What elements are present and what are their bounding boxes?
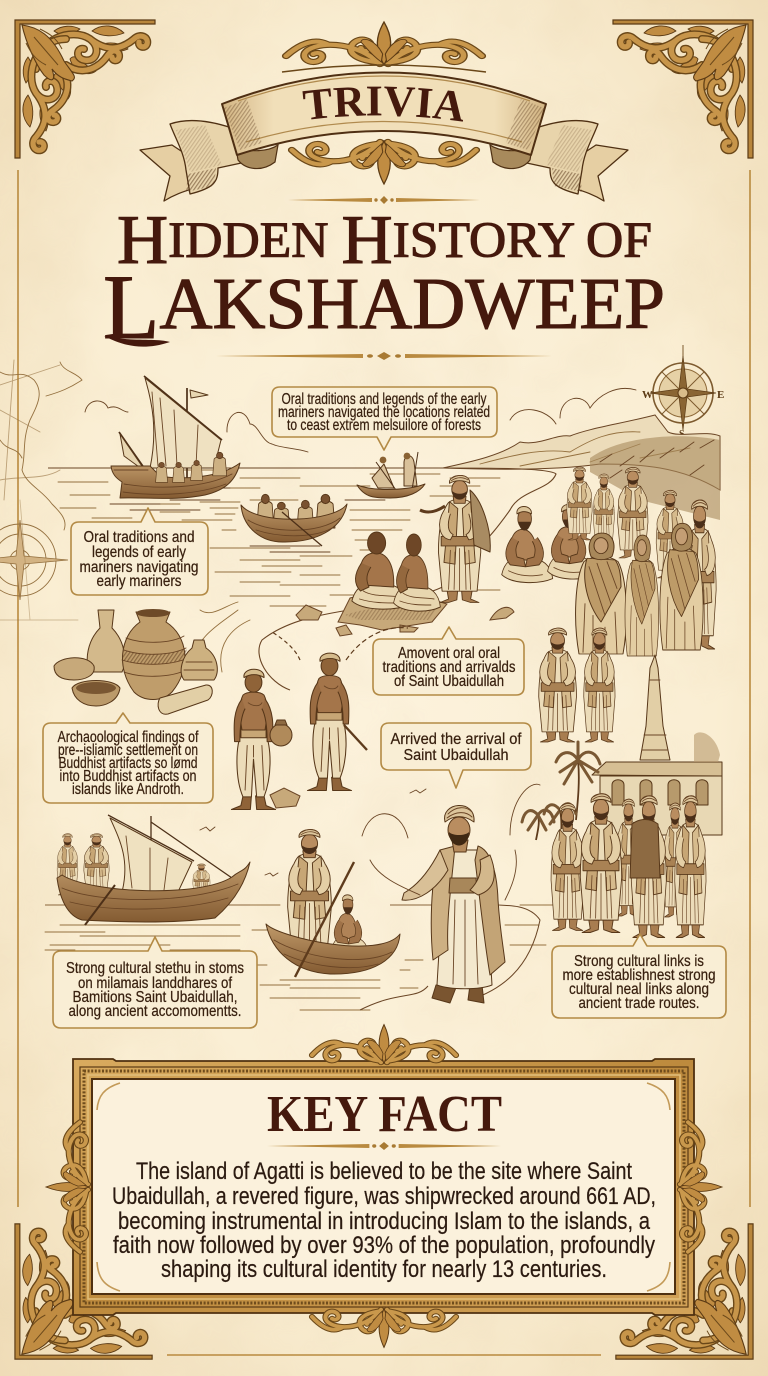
illustration: far boat with two standing figures [357, 452, 425, 498]
key fact inner panel [92, 1079, 675, 1294]
compass rose top right: E [717, 389, 724, 401]
illustration: seated elders [502, 505, 594, 583]
background map and compass left [0, 360, 82, 620]
callout: early mariners: legends of early [92, 544, 186, 561]
callout: early mariners: Oral traditions and [84, 529, 194, 546]
callout: early mariners: early mariners [96, 573, 182, 590]
callout: strong cultural links: ancient trade routes. [578, 995, 700, 1012]
ornament: top-left corner [15, 20, 155, 158]
illustration: bare-chested man with pot [231, 669, 292, 810]
callout: oral traditions, top centre: to ceast extrem melsuilore of forests [287, 417, 481, 434]
callout: oral traditions, top centre [272, 387, 497, 450]
illustration: two men in robes [539, 628, 615, 742]
illustration: crowd of islanders [567, 467, 716, 656]
sea and shoreline strokes [45, 468, 556, 1010]
callout: strong cultural stethu: Strong cultural stethu in stoms [66, 960, 244, 977]
divider under banner [288, 196, 480, 204]
illustration: trading dhow with crew [57, 815, 250, 925]
callout: archaeological findings: pre--isliamic settlement on [58, 742, 198, 759]
illustration: palm trees [522, 742, 600, 845]
rocks on the beach [270, 594, 514, 808]
compass rose top right: W [642, 389, 653, 401]
title: lakshadweep: AKSHADWEEP [159, 263, 665, 344]
callout: oral traditions, top centre: mariners navigated the locations related [278, 404, 490, 421]
callout: strong cultural stethu: on milamais landdhares of [78, 975, 233, 992]
key fact body text [112, 1158, 656, 1283]
ornament: bottom-right corner [616, 1224, 753, 1359]
callout: amovent oral traditions: traditions and arrivalds [382, 659, 516, 676]
callout: amovent oral traditions: of Saint Ubaidullah [394, 673, 504, 690]
callout: strong cultural links: cultural neal links along [569, 981, 709, 998]
callout: strong cultural links: Strong cultural links is [574, 953, 704, 970]
title: hidden history of: H [341, 202, 393, 279]
illustration: standing storyteller and seated listeners [352, 475, 490, 611]
callout: strong cultural stethu: Bamitions Saint Ubaidullah, [72, 989, 238, 1006]
illustration: pottery and scroll artefacts [54, 609, 217, 714]
callout: early mariners: mariners navigating [80, 559, 198, 576]
key fact body text: faith now followed by over 93% of the population, profoundly [113, 1232, 655, 1259]
clouds near saint and birds [200, 784, 540, 900]
key fact body text: becoming instrumental in introducing Islam to the islands, a [118, 1208, 651, 1235]
compass rose top right: S [679, 429, 685, 440]
illustration: lighthouse tower and colonnade [592, 655, 722, 835]
illustration: large dhow at sea [111, 376, 240, 498]
callout: arrival of saint ubaidullah [381, 723, 531, 788]
callout: archaeological findings [43, 713, 213, 803]
key fact body text: The island of Agatti is believed to be the site where Saint [136, 1158, 632, 1185]
key fact body text: Ubaidullah, a revered figure, was shipwrecked around 661 AD, [112, 1183, 656, 1210]
title: hidden history of: H [117, 202, 168, 279]
illustration: rowing boat with four figures [241, 494, 347, 546]
ornament: top-right corner [613, 20, 753, 158]
title: lakshadweep: L [103, 256, 159, 358]
callout: strong cultural links: more establishnest strong [562, 967, 716, 984]
divider under title [216, 352, 552, 360]
callout: strong cultural links [552, 934, 726, 1018]
banner: trivia ribbon [139, 20, 629, 202]
ornament: bottom-left corner [15, 1224, 152, 1359]
banner: trivia ribbon: TRIVIA [302, 86, 463, 122]
illustration: man with sword [272, 628, 408, 790]
callout: archaeological findings: islands like Androth. [72, 781, 184, 798]
callout: arrival of saint ubaidullah: Saint Ubaidullah [404, 747, 508, 764]
callout: oral traditions, top centre: Oral traditions and legends of the early [282, 391, 487, 408]
callout: amovent oral traditions: Amovent oral oral [398, 645, 500, 662]
clouds and distant hills [85, 388, 720, 520]
callout: early mariners [71, 508, 208, 595]
title: hidden history of: ISTORY OF [393, 213, 652, 269]
callout: archaeological findings: Archaoological findings of [58, 729, 199, 746]
key fact body text: shaping its cultural identity for nearly 13 centuries. [161, 1256, 607, 1283]
callout: strong cultural stethu [53, 937, 257, 1028]
callout: strong cultural stethu: along ancient accomomentts. [68, 1003, 242, 1020]
illustration: boatman and passenger [266, 829, 400, 977]
title: hidden history of: IDDEN [168, 213, 341, 269]
callout: amovent oral traditions [373, 627, 524, 695]
illustration: saint ubaidullah [402, 805, 505, 1003]
panel: key fact frame [46, 1025, 722, 1347]
callout: archaeological findings: into Buddhist artifacts on [60, 768, 196, 785]
illustration: group of elders [551, 794, 706, 938]
compass rose top right [642, 345, 724, 440]
callout: archaeological findings: Buddhist artifacts so lømd [58, 755, 198, 772]
key fact heading: KEY FACT [267, 1086, 502, 1143]
title swash [104, 336, 170, 347]
key fact divider [267, 1142, 501, 1150]
callout: arrival of saint ubaidullah: Arrived the arrival of [390, 731, 522, 748]
